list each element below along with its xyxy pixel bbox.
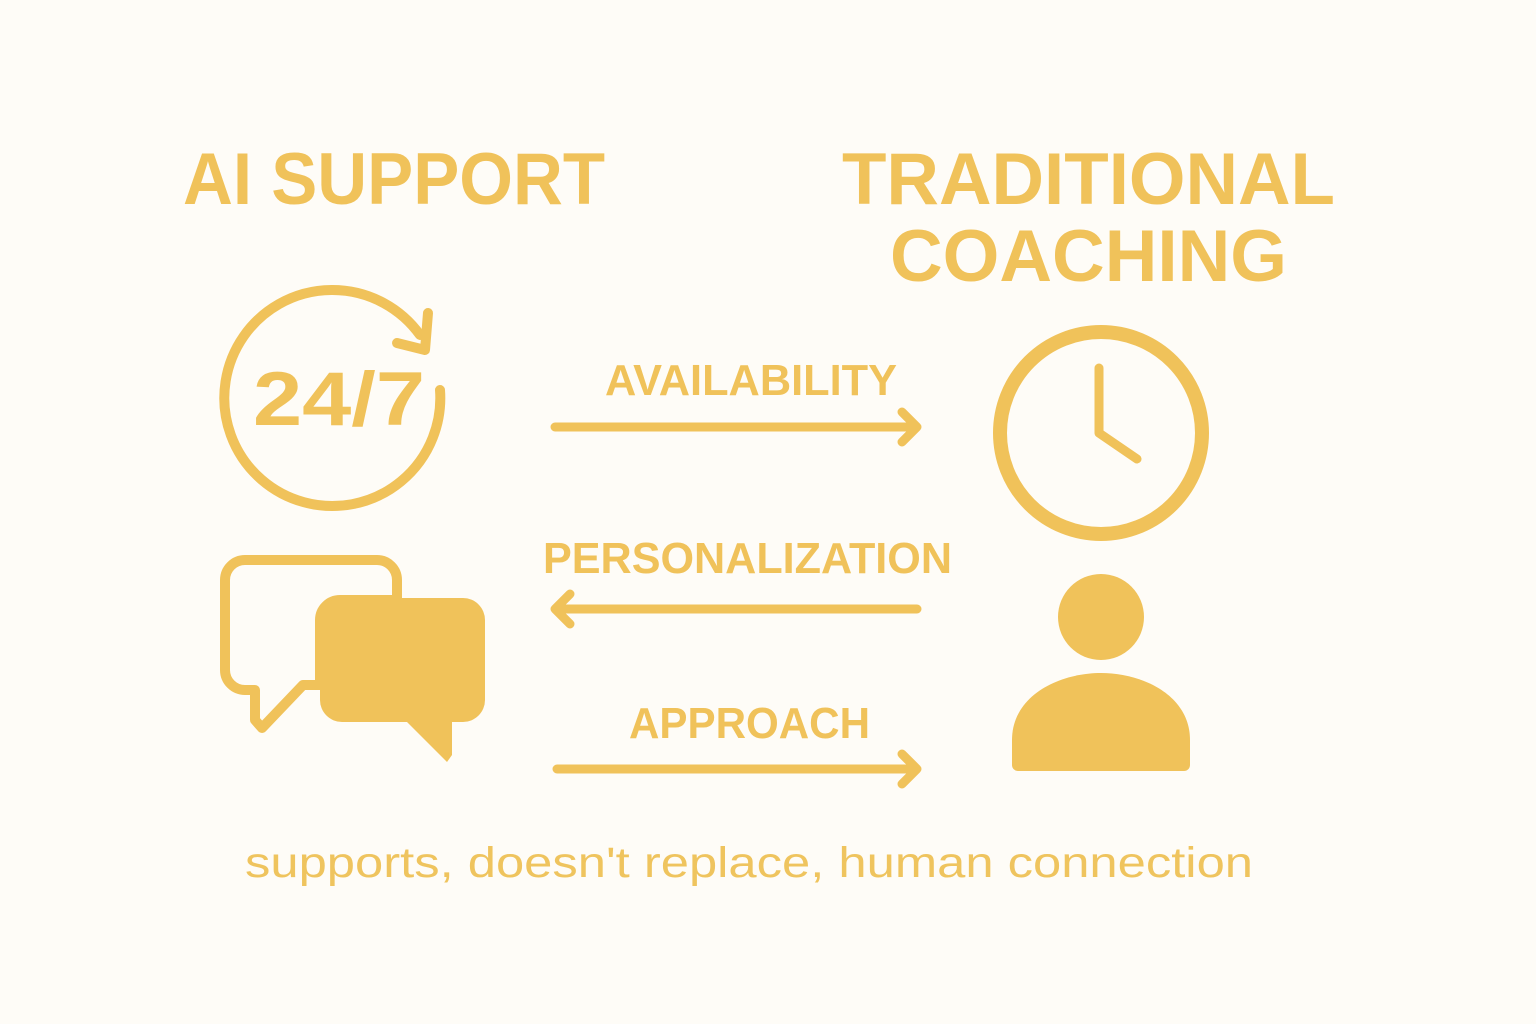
title: AI support: AI SUPPORT bbox=[183, 139, 605, 220]
arrow: personalization left bbox=[555, 594, 917, 624]
icon: 24/7 cycle bbox=[224, 290, 440, 506]
title: traditional coaching: TRADITIONAL bbox=[842, 139, 1335, 220]
label: personalization: PERSONALIZATION bbox=[543, 534, 952, 583]
label: approach: APPROACH bbox=[629, 699, 870, 748]
label: availability: AVAILABILITY bbox=[605, 356, 897, 405]
arrow: availability right bbox=[555, 412, 917, 442]
icon: chat bubbles bbox=[225, 560, 485, 762]
arrow: approach right bbox=[557, 754, 917, 784]
caption: supports, doesn't replace, human connection bbox=[245, 839, 1253, 887]
title: traditional coaching bbox=[842, 139, 1335, 297]
icon: clock bbox=[1000, 332, 1202, 534]
icon: person bbox=[1012, 574, 1190, 771]
icon: 24/7 cycle: 24/7 bbox=[253, 357, 425, 442]
title: traditional coaching: COACHING bbox=[890, 216, 1287, 297]
